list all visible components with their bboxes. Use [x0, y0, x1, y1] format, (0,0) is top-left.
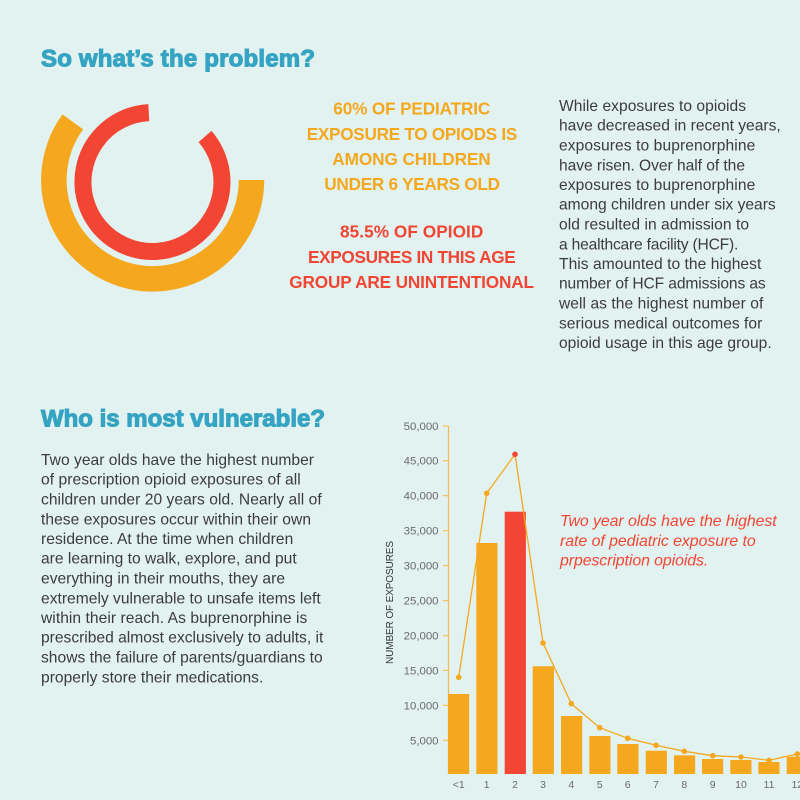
y axis labels: 15,000 — [404, 665, 438, 677]
x axis labels: 6 — [625, 779, 631, 791]
y axis labels: 35,000 — [404, 526, 438, 538]
text block: two year olds: within their reach. As buprenorphine is — [40, 610, 308, 627]
y axis title: NUMBER OF EXPOSURES — [385, 541, 396, 664]
x axis labels: 8 — [681, 779, 687, 791]
callout: 85.5% statistic: 85.5% OF OPIOID — [340, 222, 483, 242]
y axis labels: 50,000 — [404, 421, 438, 433]
callout: 60% statistic: UNDER 6 YEARS OLD — [324, 174, 500, 194]
heading: Who is most vulnerable?: Who is most vulnerable? — [41, 406, 325, 433]
text block: buprenorphine exposures: have decreased in recent years, — [559, 118, 781, 135]
x axis labels: 4 — [568, 779, 574, 791]
text block: buprenorphine exposures: serious medical outcomes for — [559, 315, 762, 332]
text block: buprenorphine exposures: While exposures to opioids — [559, 98, 746, 115]
text block: two year olds: children under 20 years old. Nearly all of — [41, 492, 322, 509]
text block: two year olds: Two year olds have the highest number — [41, 452, 314, 469]
text block: two year olds: are learning to walk, explore, and put — [41, 551, 297, 568]
text block: buprenorphine exposures: exposures to buprenorphine — [559, 138, 755, 155]
callout: 85.5% statistic — [289, 222, 534, 292]
text block: two year olds: shows the failure of parents/guardians to — [41, 650, 323, 667]
text block: buprenorphine exposures: old resulted in admission to — [559, 217, 749, 234]
x axis labels: 11 — [764, 779, 775, 791]
text block: buprenorphine exposures: opioid usage in this age group. — [559, 335, 772, 352]
callout: 60% statistic: 60% OF PEDIATRIC — [333, 99, 490, 119]
text block: two year olds: extremely vulnerable to unsafe items left — [41, 590, 321, 607]
text block: buprenorphine exposures: have risen. Over half of the — [559, 157, 745, 174]
callout: chart annotation: prpescription opioids. — [559, 553, 708, 570]
x axis labels: 7 — [653, 779, 659, 791]
y axis labels: 40,000 — [404, 491, 438, 503]
y axis labels: 25,000 — [404, 596, 438, 608]
y axis labels: 45,000 — [404, 456, 438, 468]
text block: two year olds — [40, 452, 324, 686]
text block: two year olds: properly store their medications. — [41, 669, 263, 686]
trend line — [459, 454, 800, 760]
x axis labels: 1 — [484, 779, 490, 791]
text block: buprenorphine exposures: a healthcare facility (HCF). — [559, 236, 738, 253]
x axis labels: 3 — [540, 779, 546, 791]
callout: chart annotation — [559, 513, 777, 570]
y axis labels: 30,000 — [404, 561, 438, 573]
text block: buprenorphine exposures: among children under six years — [559, 197, 776, 214]
callout: 85.5% statistic: EXPOSURES IN THIS AGE — [308, 247, 516, 267]
x axis labels: 5 — [597, 779, 603, 791]
y axis labels — [404, 421, 438, 747]
heading: So what's the problem?: So what’s the problem? — [41, 46, 315, 73]
y axis labels: 5,000 — [410, 735, 438, 747]
callout: 60% statistic: EXPOSURE TO OPIODS IS — [307, 124, 517, 144]
text block: two year olds: residence. At the time when children — [41, 531, 293, 548]
callout: 60% statistic — [307, 99, 517, 194]
callout: chart annotation: Two year olds have the highest — [560, 513, 777, 530]
text block: two year olds: prescribed almost exclusively to adults, it — [41, 630, 324, 647]
text block: buprenorphine exposures: number of HCF admissions as — [559, 276, 766, 293]
x axis labels: 10 — [735, 779, 747, 791]
text block: buprenorphine exposures: exposures to buprenorphine — [559, 177, 755, 194]
callout: chart annotation: rate of pediatric exposure to — [560, 533, 756, 550]
text block: two year olds: these exposures occur within their own — [41, 511, 311, 528]
text block: buprenorphine exposures — [558, 98, 781, 352]
text block: buprenorphine exposures: well as the highest number of — [558, 296, 764, 313]
donut chart: concentric percentage rings — [54, 113, 251, 279]
bars — [448, 512, 800, 774]
text block: buprenorphine exposures: This amounted to the highest — [559, 256, 762, 273]
x axis labels: 2 — [512, 779, 518, 791]
ring: 60% orange — [54, 122, 251, 279]
bar chart: exposures by age — [385, 421, 800, 791]
x axis labels — [453, 779, 800, 791]
y axis labels: 10,000 — [404, 700, 438, 712]
x axis labels: <1 — [453, 779, 465, 791]
trend points — [456, 452, 800, 763]
text block: two year olds: of prescription opioid exposures of all — [41, 472, 301, 489]
y axis line and ticks — [443, 426, 448, 774]
ring: 85.5% red — [83, 113, 222, 252]
callout: 60% statistic: AMONG CHILDREN — [332, 149, 491, 169]
y axis labels: 20,000 — [404, 631, 438, 643]
text block: two year olds: everything in their mouths, they are — [41, 571, 285, 588]
x axis labels: 9 — [710, 779, 716, 791]
callout: 85.5% statistic: GROUP ARE UNINTENTIONAL — [289, 272, 534, 292]
